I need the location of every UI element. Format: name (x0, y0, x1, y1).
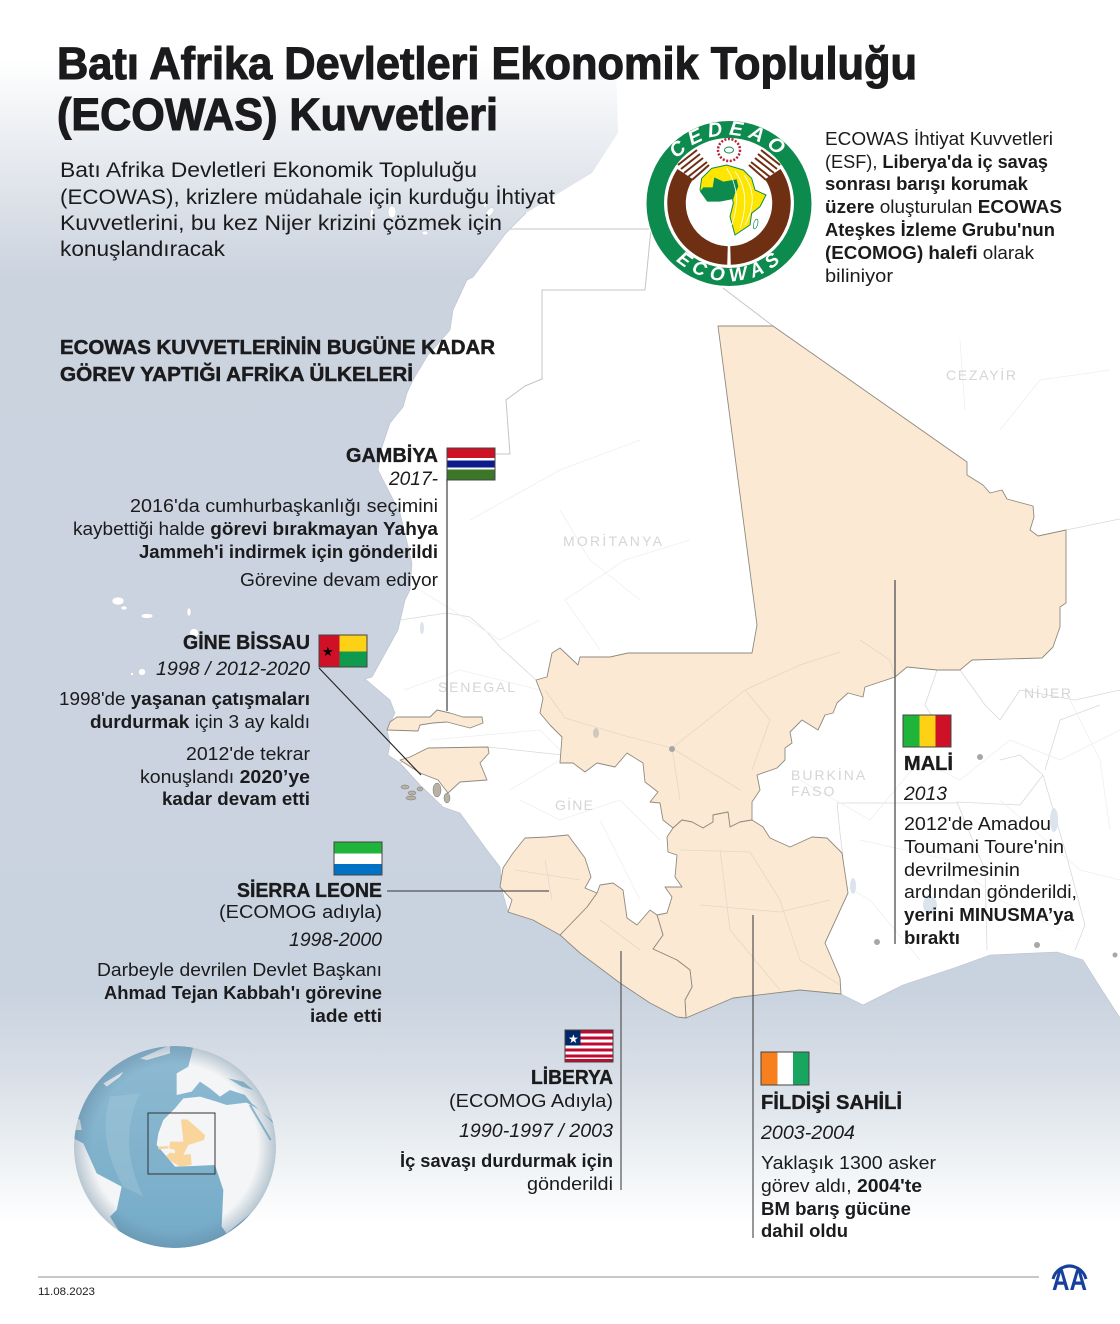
leader line (446, 479, 448, 711)
map: West Africa (112, 0, 1120, 1018)
description: kadar devam etti (162, 788, 310, 809)
leader line (387, 890, 549, 892)
dates: 1990-1997 / 2003 (459, 1121, 613, 1142)
description: 2012'de tekrar (186, 743, 310, 764)
country name: Burkina Faso: FASO (791, 783, 836, 799)
description: bıraktı (904, 927, 960, 948)
ESF description: sonrası barışı korumak (825, 173, 1029, 194)
description: BM barış gücüne (761, 1198, 911, 1219)
name: SİERRA LEONE (237, 879, 382, 902)
flag: Sierra Leone (334, 842, 382, 875)
ECOWAS logo: ECOWAS (676, 252, 778, 282)
description: ardından gönderildi, (904, 881, 1077, 902)
islands (112, 198, 496, 676)
description: gönderildi (527, 1173, 613, 1194)
title (57, 38, 917, 140)
description (97, 959, 382, 1026)
AA logo: AA (1052, 1264, 1087, 1297)
country: Mali (536, 326, 1066, 828)
description: iade etti (310, 1005, 382, 1026)
description: görev aldı, 2004'te (761, 1175, 922, 1196)
ESF description: Ateşkes İzleme Grubu'nun (825, 219, 1055, 240)
description: Toumani Toure'nin (904, 836, 1064, 857)
intro paragraph: Kuvvetlerini, bu kez Nijer krizini çözmek için (60, 211, 502, 235)
description (73, 495, 439, 590)
title: Batı Afrika Devletleri Ekonomik Topluluğu (57, 38, 917, 89)
country borders: Sahara (495, 229, 773, 454)
flag: Guinea-Bissau: ★ (322, 644, 334, 659)
description: 2012'de Amadou (904, 813, 1051, 834)
description: İç savaşı durdurmak için (400, 1150, 613, 1171)
description: Jammeh'i indirmek için gönderildi (139, 541, 438, 562)
section heading: ECOWAS KUVVETLERİNİN BUGÜNE KADAR (60, 336, 496, 359)
description: yerini MINUSMA’ya (904, 904, 1075, 925)
flag: Guinea-Bissau (319, 635, 367, 667)
flag: Liberia (565, 1030, 613, 1062)
water (420, 622, 1058, 914)
leader line (620, 951, 622, 1190)
description: Darbeyle devrilen Devlet Başkanı (97, 959, 382, 980)
panel: Fildişi Sahili (753, 915, 936, 1241)
ECOWAS logo: CEDEAO (671, 121, 785, 156)
country: Guinea-Bissau (400, 747, 489, 793)
panel: Gine Bissau (59, 631, 421, 809)
leader line (319, 668, 421, 775)
description: Yaklaşık 1300 asker (761, 1152, 936, 1173)
ECOWAS logo (646, 121, 812, 286)
description: kaybettiği halde görevi bırakmayan Yahya (73, 518, 439, 539)
dates: 2017- (388, 469, 438, 490)
description (59, 688, 310, 809)
subtitle: (ECOMOG Adıyla) (449, 1090, 613, 1111)
description (904, 813, 1077, 948)
description: devrilmesinin (904, 859, 1020, 880)
description (400, 1150, 613, 1194)
subtitle: (ECOMOG adıyla) (219, 901, 382, 922)
dates: 2003-2004 (760, 1123, 855, 1144)
leader line (894, 580, 896, 944)
land mass (365, 0, 1120, 1018)
leader line (752, 915, 754, 1238)
panel: Mali (895, 580, 1077, 948)
ESF description: biliniyor (825, 265, 893, 286)
name: FİLDİŞİ SAHİLİ (761, 1091, 902, 1114)
description: durdurmak için 3 ay kaldı (90, 711, 310, 732)
ESF description: (ESF), Liberya'da iç savaş (825, 151, 1048, 172)
name: LİBERYA (531, 1066, 613, 1089)
section heading: GÖREV YAPTIĞI AFRİKA ÜLKELERİ (60, 362, 413, 386)
intro paragraph: konuşlandıracak (60, 237, 225, 261)
flag: Ivory Coast (761, 1052, 809, 1085)
country borders (400, 519, 1120, 950)
inner roads in highlighted countries (515, 640, 895, 990)
flag: Liberia: ★ (568, 1032, 579, 1046)
name: MALİ (904, 752, 953, 775)
country name: Nijer: NİJER (1024, 684, 1073, 701)
country: Sierra Leone (500, 835, 597, 935)
country name: Moritanya: MORİTANYA (563, 532, 664, 549)
description: 1998'de yaşanan çatışmaları (59, 688, 310, 709)
date: 11.08.2023 (38, 1286, 95, 1298)
panel: Sierra Leone (97, 842, 549, 1026)
locator rectangle (148, 1113, 215, 1174)
ESF description (825, 128, 1062, 286)
ESF description: (ECOMOG) halefi olarak (825, 242, 1035, 263)
description: konuşlandı 2020’ye (140, 766, 310, 787)
country name: Cezayir: CEZAYİR (946, 366, 1018, 383)
flag: Mali (903, 715, 951, 747)
description (761, 1152, 936, 1241)
dates: 1998-2000 (289, 930, 382, 951)
country: Liberia (560, 883, 692, 1018)
ESF description: üzere oluşturulan ECOWAS (825, 196, 1062, 217)
flag: Gambia (447, 448, 495, 480)
dates: 2013 (903, 784, 947, 805)
description: dahil oldu (761, 1220, 848, 1241)
panel: Gambiya (73, 444, 495, 711)
ESF description: ECOWAS İhtiyat Kuvvetleri (825, 128, 1053, 149)
name: GİNE BİSSAU (183, 631, 310, 654)
country name: Gine: GİNE (555, 796, 595, 813)
roads and rivers (404, 340, 1120, 960)
description: 2016'da cumhurbaşkanlığı seçimini (130, 495, 438, 516)
footer rule (38, 1276, 1039, 1278)
title: (ECOWAS) Kuvvetleri (57, 89, 498, 140)
coastline (365, 213, 1120, 1018)
country: Gambia (387, 710, 483, 731)
country name: Senegal: SENEGAL (438, 679, 517, 695)
intro paragraph (60, 158, 555, 261)
intro paragraph: (ECOWAS), krizlere müdahale için kurduğu İhtiyat (60, 185, 555, 209)
country: Ivory Coast (653, 812, 848, 1018)
intro paragraph: Batı Afrika Devletleri Ekonomik Topluluğu (60, 158, 477, 182)
section heading (60, 336, 496, 386)
locator globe (74, 1046, 276, 1248)
country name: Burkina Faso: BURKİNA (791, 766, 867, 783)
name: GAMBİYA (346, 444, 438, 467)
description: Görevine devam ediyor (240, 569, 438, 590)
panel: Liberya (400, 951, 621, 1194)
dates: 1998 / 2012-2020 (156, 659, 310, 680)
coastal islands of Guinea-Bissau (401, 783, 450, 803)
description: Ahmad Tejan Kabbah'ı görevine (104, 982, 382, 1003)
city markers (593, 728, 1118, 958)
highlighted countries (387, 326, 1066, 1018)
